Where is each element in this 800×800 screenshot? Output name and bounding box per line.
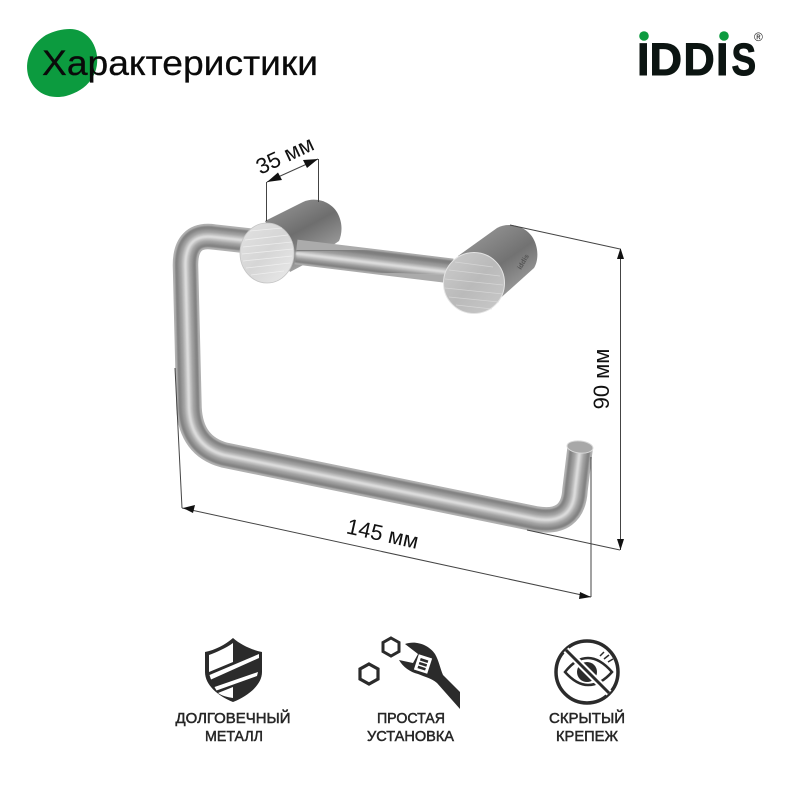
logo: IDDIS xyxy=(637,30,763,85)
frame tube xyxy=(185,237,580,520)
right cylinder face xyxy=(444,252,504,314)
label: hidden mount: СКРЫТЫЙ xyxy=(549,709,625,727)
right cylinder body xyxy=(458,225,537,303)
label: easy installation xyxy=(367,710,454,745)
dimension: 145 mm: 145 мм xyxy=(344,514,421,554)
icon: hidden fastening xyxy=(556,641,618,703)
tube end cap xyxy=(566,440,594,454)
dimension: 145 mm xyxy=(175,368,591,599)
logo: IDDIS: D xyxy=(650,34,682,85)
green blob behind title xyxy=(27,29,97,97)
icon: shield xyxy=(205,638,262,702)
left cylinder face xyxy=(240,223,294,283)
label: hidden mount xyxy=(549,709,625,745)
logo: IDDIS: S xyxy=(732,35,756,85)
logo: IDDIS: I xyxy=(637,34,650,85)
label: easy installation: УСТАНОВКА xyxy=(367,728,454,745)
dimension: 35 mm: 35 мм xyxy=(252,131,318,179)
label: durable metal: ДОЛГОВЕЧНЫЙ xyxy=(176,709,290,727)
title: Характеристики xyxy=(42,44,318,83)
label: hidden mount: КРЕПЕЖ xyxy=(556,728,618,745)
dimension: 35 mm xyxy=(252,131,318,221)
logo: IDDIS: ® xyxy=(754,30,763,44)
label: easy installation: ПРОСТАЯ xyxy=(377,710,445,727)
icon: wrench and nuts xyxy=(360,638,460,709)
logo: IDDIS: D xyxy=(684,35,715,85)
crossbar tube xyxy=(296,252,452,272)
left cylinder body xyxy=(265,200,342,272)
label: durable metal: МЕТАЛЛ xyxy=(205,728,263,745)
product: paper holder xyxy=(185,200,594,520)
dimension: 90 mm: 90 мм xyxy=(589,349,614,409)
engraved mark: iddis xyxy=(517,253,531,271)
label: durable metal xyxy=(176,709,290,745)
logo: IDDIS: I xyxy=(716,34,729,85)
dimension: 90 mm xyxy=(510,225,624,550)
